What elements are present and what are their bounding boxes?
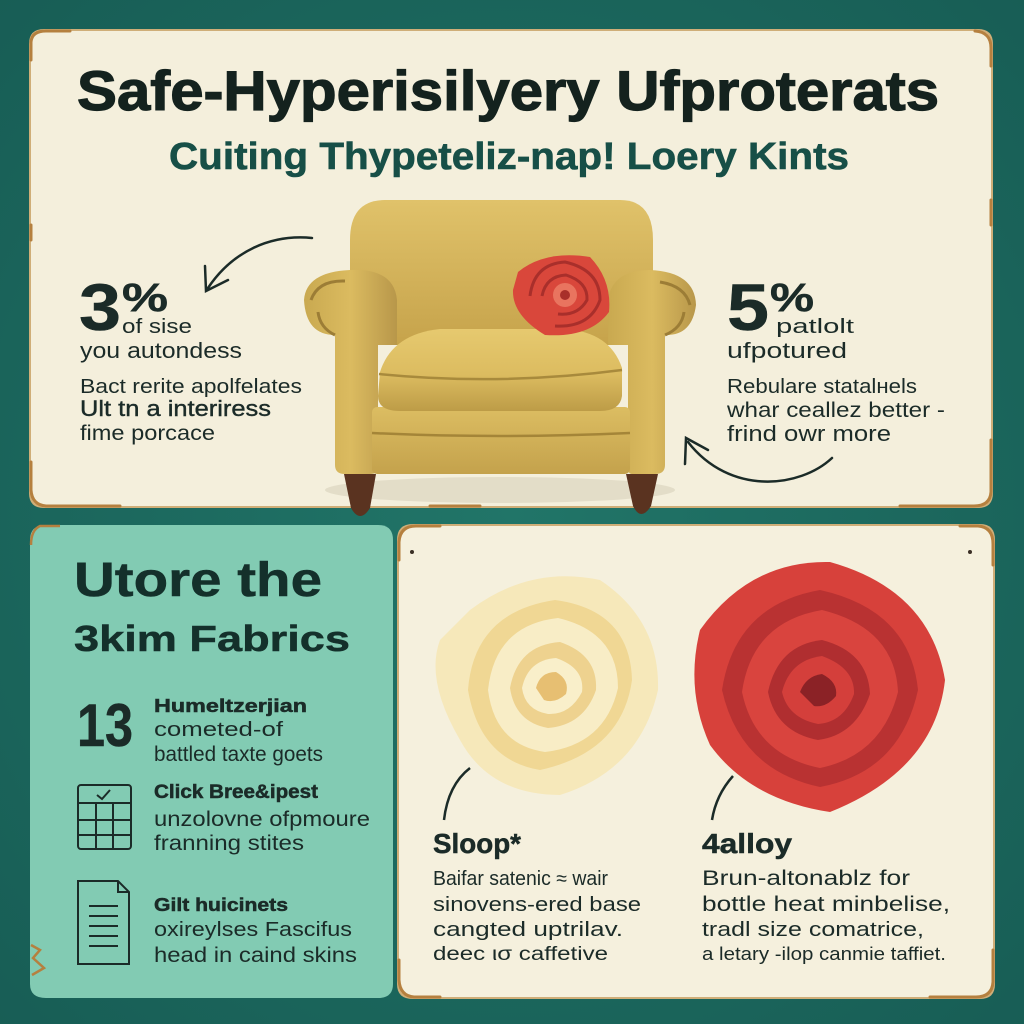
list item 1: cometed-of bbox=[154, 719, 284, 741]
left arm bbox=[304, 270, 397, 474]
text: cream fabric: Baifar satenic ≈ wair bbox=[433, 868, 608, 890]
right stat: % bbox=[770, 276, 814, 320]
panel heading: Utore the bbox=[74, 554, 322, 607]
text: cream fabric: Sloop* bbox=[433, 828, 521, 859]
left stat: 3 bbox=[79, 270, 121, 344]
lower base bbox=[372, 407, 630, 474]
list item 3: head in caind skins bbox=[154, 944, 357, 967]
list item 1: 13 bbox=[77, 692, 133, 759]
list item 1: battled taxte goets bbox=[154, 743, 323, 766]
seat cushion bbox=[378, 329, 622, 411]
legs bbox=[344, 474, 376, 516]
text: red fabric: Brun-altonablz for bbox=[702, 867, 910, 890]
text: cream fabric bbox=[433, 828, 641, 965]
text: red fabric: bottle heat minbelise, bbox=[702, 893, 950, 916]
arrow: left stat to chair bbox=[205, 237, 312, 291]
arrow: right stat to chair bbox=[685, 438, 832, 482]
right stat: whar ceallez better - bbox=[726, 399, 945, 422]
back bbox=[350, 200, 653, 345]
text: red fabric: 4alloy bbox=[702, 828, 792, 859]
panel: armchair overview bbox=[30, 30, 992, 516]
left stat: % bbox=[122, 276, 168, 320]
text: cream fabric: deec ισ caffetive bbox=[433, 944, 608, 965]
right stat: 5 bbox=[727, 270, 769, 344]
rose on chair bbox=[513, 255, 609, 335]
list item 3 bbox=[78, 881, 357, 967]
callout mark: red bbox=[712, 776, 733, 820]
left stat: of sise bbox=[122, 316, 192, 338]
panel: fabrics list: 3kim Fabrics bbox=[74, 618, 350, 659]
text: red fabric: a letary -ilop canmie taffiet. bbox=[702, 944, 946, 964]
subtitle: Cuiting Thypeteliz-nap! Loery Kints bbox=[169, 136, 849, 178]
callout mark: cream bbox=[444, 768, 470, 820]
text: cream fabric: sinovens-ered base bbox=[433, 894, 641, 916]
right arm bbox=[608, 270, 696, 474]
icon: document bbox=[78, 881, 129, 964]
left stat bbox=[79, 270, 302, 445]
list item 3: Gilt huicinets bbox=[154, 895, 288, 915]
left stat: Bact rerite apolfelates bbox=[80, 376, 302, 398]
title: Safe-Hyperisilyery Ufproterats bbox=[77, 59, 939, 122]
text: red fabric bbox=[702, 828, 950, 964]
armchair bbox=[304, 200, 696, 516]
panel: fabrics list bbox=[30, 525, 393, 998]
icon: cream fabric rose bbox=[436, 576, 658, 795]
list item 2: franning stites bbox=[154, 832, 304, 855]
left stat: you autondess bbox=[80, 338, 242, 363]
right stat: ufpotured bbox=[727, 338, 847, 363]
right stat: Rebulare statalнels bbox=[727, 376, 917, 398]
panel: fabric swatches bbox=[398, 525, 994, 998]
right stat: frind owr more bbox=[727, 421, 891, 446]
icon: calendar table bbox=[78, 785, 131, 849]
text: cream fabric: cangted uptrilav. bbox=[433, 919, 623, 941]
list item 2: Click Bree&ipest bbox=[154, 782, 319, 803]
right stat: patlolt bbox=[776, 316, 855, 338]
list item 2: unzolovne ofpmoure bbox=[154, 808, 370, 831]
text: red fabric: tradl size comatrice, bbox=[702, 919, 924, 941]
left stat: fime porcace bbox=[80, 422, 215, 445]
left stat: Ult tn a interiress bbox=[80, 396, 271, 421]
list item 1: Humeltzerjian bbox=[154, 696, 307, 716]
list item 1 bbox=[77, 692, 323, 766]
list item 3: oxireylses Fascifus bbox=[154, 919, 352, 941]
icon: red fabric rose bbox=[694, 562, 945, 812]
list item 2 bbox=[78, 782, 370, 855]
right stat bbox=[726, 270, 945, 446]
